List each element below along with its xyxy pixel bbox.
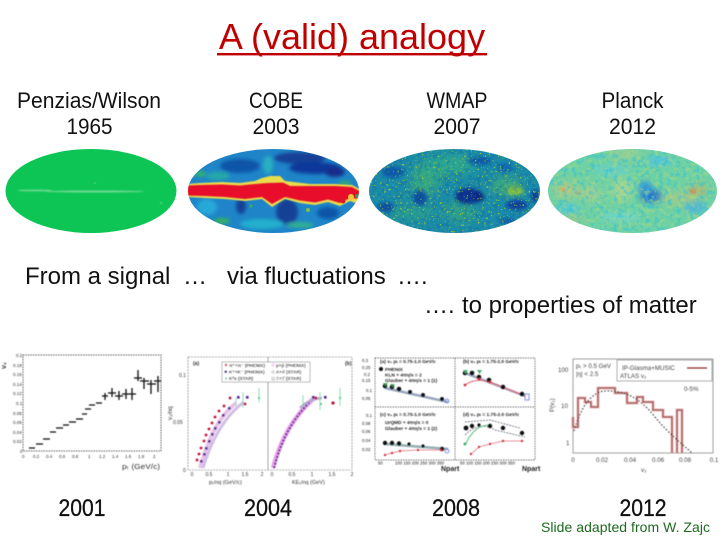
chart 2008: v2 vs Npart, four panels: KLN + 4πη/s = 2: [385, 372, 422, 378]
chart 2012: P(v2) histogram: 0: [571, 457, 575, 464]
chart 2012: P(v2) histogram: 0.1: [710, 457, 719, 464]
credit: slide adapted: Slide adapted from W. Zajc: [541, 519, 710, 535]
chart 2008: v2 vs Npart, four panels: 0.1: [366, 388, 373, 393]
heading: COBE 2003: [249, 88, 303, 139]
chart 2012: P(v2) histogram: P(v₂): [549, 398, 556, 412]
heading: Penzias/Wilson 1965: [17, 88, 161, 139]
chart 2012: P(v2) histogram: 10: [561, 403, 568, 410]
chart 2001: v2 vs pT: 2: [153, 454, 156, 459]
chart 2001: v2 vs pT: 0.6: [59, 454, 66, 459]
chart 2008: v2 vs Npart, four panels: Npart: [441, 466, 460, 473]
text: to properties of matter: ….: [424, 292, 455, 319]
chart 2008: v2 vs Npart, four panels: Glauber + 4πη/s = 1 (2): [385, 426, 438, 432]
text: from a signal via fluctuations: via fluctuations: [227, 263, 386, 290]
panel (b) points: [463, 370, 529, 400]
chart 2001: v2 vs pT: 0.04: [13, 430, 22, 435]
chart 2004: scaled v2: KEₜ/nq (GeV): [292, 480, 325, 486]
heading: WMAP 2007: [426, 88, 488, 139]
chart 2004: scaled v2: 0: [191, 472, 194, 478]
chart 2001: v2 vs pT: 1: [88, 454, 91, 459]
title: A (valid) analogy: [219, 16, 485, 57]
chart 2004: scaled v2: 1.5: [242, 472, 249, 478]
chart 2004: scaled v2: 0.5: [289, 472, 296, 478]
galactic plane band: yellow rim and red core: [187, 176, 361, 212]
chart 2001: v2 vs pT: 0.18: [13, 363, 22, 368]
heading: Planck 2012: [602, 88, 664, 139]
chart 2001: v2 vs pT: 0.2: [16, 353, 23, 358]
chart 2004: scaled v2: 2: [261, 472, 264, 478]
chart 2012: P(v2) histogram: pₜ > 0.5 GeV: [576, 363, 612, 370]
chart 2012: P(v2) histogram: 100: [558, 367, 569, 374]
chart 2008: v2 vs Npart, four panels: 0.08: [362, 421, 371, 426]
chart 2008: v2 vs Npart, four panels: 0.15: [362, 378, 371, 383]
chart 2008: v2 vs Npart, four panels: 100 150 200 250 300 350: [395, 460, 445, 466]
chart 2001: v2 vs pT: 0.4: [46, 454, 53, 459]
chart 2008: v2 vs Npart, four panels: (b) v₂ pₜ = 1.75-2.0 GeV/c: [463, 359, 519, 365]
chart 2001: v2 vs pT: 0.1: [16, 401, 23, 406]
chart 2008: v2 vs Npart, four panels: (a) v₂ pₜ = 0.75-1.0 GeV/c: [380, 359, 436, 365]
legend: p+p̄ (PHENIX): [276, 363, 306, 368]
chart 2001: v2 vs pT: [1, 353, 161, 471]
sky map: COBE: [187, 148, 361, 234]
chart 2008: v2 vs Npart, four panels: 0.2: [364, 372, 371, 377]
sky map: Planck: [547, 148, 719, 234]
text: from a signal via fluctuations: From a signal: [25, 263, 170, 290]
chart 2012: P(v2) histogram: 0.02: [596, 457, 609, 464]
legend: Ξ+Ξ̄ (STAR): [276, 376, 302, 381]
heading: Penzias/Wilson 1965: Penzias/Wilson: [17, 88, 161, 113]
panel (a) points: [379, 367, 449, 403]
panel (d) points: [464, 420, 525, 455]
chart 2008: v2 vs Npart, four panels: Npart: [522, 466, 541, 473]
chart 2001: v2 vs pT: 1.6: [125, 454, 132, 459]
chart 2012: P(v2) histogram: ATLAS v₂: [620, 373, 647, 380]
panel: CMB sky maps: [5, 88, 719, 234]
chart 2004: scaled v2: 2: [351, 472, 354, 478]
legend: Λ+Λ̄ (STAR): [276, 370, 302, 374]
chart 2004: scaled v2: 0.5: [206, 472, 213, 478]
curve (b) data points: [273, 388, 341, 468]
chart 2001: v2 vs pT: 0.12: [13, 391, 22, 396]
chart 2008: v2 vs Npart, four panels: [362, 358, 541, 473]
chart 2008: v2 vs Npart, four panels: 0.25: [362, 365, 371, 370]
chart 2004: scaled v2: 0: [271, 472, 274, 478]
chart 2001: v2 vs pT: 0.8: [72, 454, 79, 459]
chart 2001: v2 vs pT: 1.8: [138, 454, 145, 459]
heading: COBE 2003: COBE: [249, 88, 303, 113]
chart 2008: v2 vs Npart, four panels: 50 100 150 200 250 300 350: [460, 460, 516, 466]
heading: Planck 2012: Planck: [602, 88, 664, 113]
chart 2008: v2 vs Npart, four panels: PHENIX: [385, 367, 404, 373]
sky map: Penzias/Wilson green: [5, 148, 178, 234]
chart 2012: P(v2) histogram: 1: [566, 440, 570, 447]
legend: π⁺+π⁻ (PHENIX): [229, 363, 265, 368]
chart 2004: scaled v2: 1: [227, 472, 230, 478]
chart 2008: v2 vs Npart, four panels: 0.02: [362, 447, 371, 452]
ATLAS dotted curve: [574, 391, 692, 453]
chart 2004: scaled v2: (a): [193, 361, 199, 367]
legend: [222, 362, 310, 382]
heading: COBE 2003: 2003: [252, 114, 300, 139]
legend keys: [687, 367, 707, 369]
chart 2004: scaled v2: pₜ/nq (GeV/c): [209, 480, 242, 486]
heading: WMAP 2007: WMAP: [426, 88, 488, 113]
year label 2012: 2012: [620, 495, 666, 522]
chart 2001: v2 vs pT: 0.16: [13, 372, 22, 377]
legend box: [617, 360, 712, 381]
chart 2008: v2 vs Npart, four panels: 0.1: [366, 413, 373, 418]
curve (a) data points: [196, 388, 260, 468]
legend: K⁺+K⁻ (PHENIX): [229, 370, 265, 374]
step histogram: [573, 388, 682, 453]
chart 2012: P(v2) histogram: [549, 359, 719, 474]
chart 2001: v2 vs pT: v₂: [1, 362, 8, 369]
chart 2001: v2 vs pT: 0.08: [13, 411, 22, 416]
text: to properties of matter: to properties of matter: [462, 292, 697, 319]
year label 2004: 2004: [244, 495, 292, 522]
year label 2001: 2001: [58, 495, 106, 522]
chart 2001: v2 vs pT: 0.02: [13, 439, 22, 444]
chart 2004: scaled v2: 0.05: [173, 420, 183, 426]
chart 2001: v2 vs pT: 1.4: [112, 454, 119, 459]
heading: Planck 2012: 2012: [609, 114, 656, 139]
chart 2004: scaled v2: 1: [311, 472, 314, 478]
chart 2008: v2 vs Npart, four panels: 0.06: [362, 429, 371, 434]
chart 2008: v2 vs Npart, four panels: 50: [378, 460, 383, 466]
chart 2004: scaled v2: 1.5: [329, 472, 336, 478]
chart 2004: scaled v2: 0: [183, 468, 186, 474]
chart 2012: P(v2) histogram: 0.08: [679, 457, 692, 464]
heading: Penzias/Wilson 1965: 1965: [66, 114, 112, 139]
chart 2012: P(v2) histogram: IP-Glasma+MUSIC: [622, 365, 675, 372]
chart 2001: v2 vs pT: pₜ (GeV/c): [122, 462, 161, 471]
data points with error bars: [29, 370, 161, 448]
chart 2004: scaled v2: (b): [345, 361, 352, 367]
chart 2004: scaled v2: 0.1: [179, 373, 186, 379]
panel (c) points: [383, 441, 449, 456]
chart 2008: v2 vs Npart, four panels: 0.3: [362, 358, 369, 363]
legend: K⁰s (STAR): [229, 376, 254, 381]
chart 2001: v2 vs pT: 0.06: [13, 420, 22, 425]
chart 2012: P(v2) histogram: |η| < 2.5: [576, 371, 599, 378]
text: from a signal via fluctuations: ….: [397, 263, 428, 290]
chart 2012: P(v2) histogram: 0.06: [652, 457, 665, 464]
chart 2004: scaled v2: v₂/nq: [168, 406, 174, 420]
chart 2008: v2 vs Npart, four panels: UrQMD + 4πη/s = 0: [385, 420, 429, 426]
text: from a signal via fluctuations: …: [183, 263, 207, 290]
year label 2008: 2008: [432, 495, 480, 522]
chart 2012: P(v2) histogram: v₂: [641, 467, 647, 474]
chart 2008: v2 vs Npart, four panels: (d) v₄ pₜ = 1.75-2.0 GeV/c: [463, 412, 519, 418]
chart 2008: v2 vs Npart, four panels: Glauber + 4πη/s = 1 (1): [385, 378, 438, 384]
chart 2001: v2 vs pT: 0.14: [13, 382, 22, 387]
band histogram: [573, 388, 682, 453]
chart 2001: v2 vs pT: 0.2: [33, 454, 40, 459]
chart 2008: v2 vs Npart, four panels: (c) v₄ pₜ = 0.75-1.0 GeV/c: [380, 412, 436, 418]
chart 2008: v2 vs Npart, four panels: 0.04: [362, 438, 371, 443]
chart 2012: P(v2) histogram: 0.04: [624, 457, 637, 464]
chart 2008: v2 vs Npart, four panels: 0.05: [362, 396, 371, 401]
heading: WMAP 2007: 2007: [434, 114, 480, 139]
sky map: WMAP: [368, 148, 541, 234]
chart 2001: v2 vs pT: 0: [20, 449, 23, 454]
chart 2001: v2 vs pT: 1.2: [99, 454, 106, 459]
chart 2012: P(v2) histogram: 0-5%: [684, 386, 699, 393]
text: from a signal via fluctuations: [25, 263, 428, 290]
chart 2004: scaled v2: [168, 357, 354, 486]
chart 2001: v2 vs pT: 0: [22, 454, 25, 459]
